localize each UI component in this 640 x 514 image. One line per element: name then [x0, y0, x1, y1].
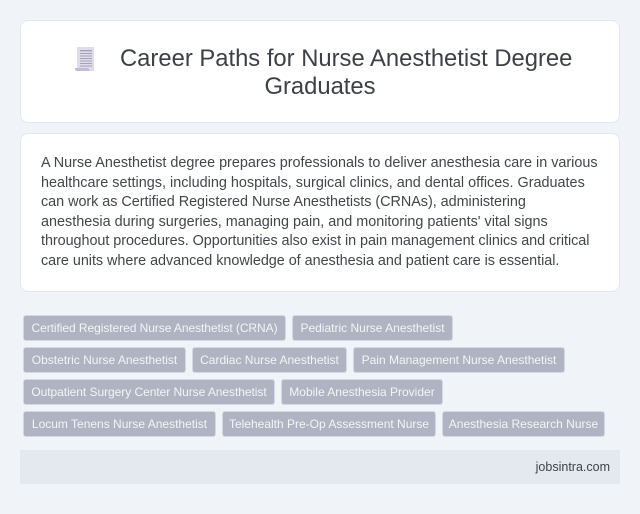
description panel — [20, 133, 620, 292]
tag — [222, 411, 436, 437]
title — [120, 45, 572, 100]
footer bar — [20, 450, 620, 484]
footer source text: jobsintra.com — [536, 460, 610, 474]
tag: Locum Tenens Nurse Anesthetist — [32, 417, 207, 431]
tag — [281, 379, 443, 405]
tag — [23, 411, 216, 437]
tag: Pediatric Nurse Anesthetist — [300, 321, 445, 335]
tag: Outpatient Surgery Center Nurse Anesthetist — [31, 385, 267, 399]
tag: Pain Management Nurse Anesthetist — [362, 353, 556, 367]
tag: Obstetric Nurse Anesthetist — [32, 353, 177, 367]
tag — [292, 315, 453, 341]
icon: document scroll — [75, 47, 94, 71]
title: Graduates — [264, 73, 376, 100]
tag: Mobile Anesthesia Provider — [289, 385, 435, 399]
description text: healthcare settings, including hospitals, surgical clinics, and dental offices. Graduates — [41, 174, 585, 190]
tag — [442, 411, 605, 437]
description text: throughout procedures. Opportunities also exist in pain management clinics and critical — [41, 233, 589, 249]
tag: Cardiac Nurse Anesthetist — [200, 353, 339, 367]
tag — [23, 379, 275, 405]
title: Career Paths for Nurse Anesthetist Degree — [120, 45, 572, 72]
description text — [41, 155, 598, 268]
description text: care units where advanced knowledge of anesthesia and patient care is essential. — [41, 252, 559, 268]
tag: Certified Registered Nurse Anesthetist (CRNA) — [31, 321, 278, 335]
tag: Telehealth Pre-Op Assessment Nurse — [229, 417, 429, 431]
description text: can work as Certified Registered Nurse Anesthetists (CRNAs), administering — [41, 194, 526, 210]
tag: Anesthesia Research Nurse — [449, 417, 598, 431]
tag — [353, 347, 565, 373]
tag — [23, 347, 186, 373]
header panel — [20, 20, 620, 123]
tag — [192, 347, 347, 373]
description text: anesthesia during surgeries, managing pain, and monitoring patients' vital signs — [41, 214, 548, 230]
career path tags — [23, 315, 605, 437]
description text: A Nurse Anesthetist degree prepares professionals to deliver anesthesia care in various — [41, 155, 598, 171]
tag — [23, 315, 286, 341]
